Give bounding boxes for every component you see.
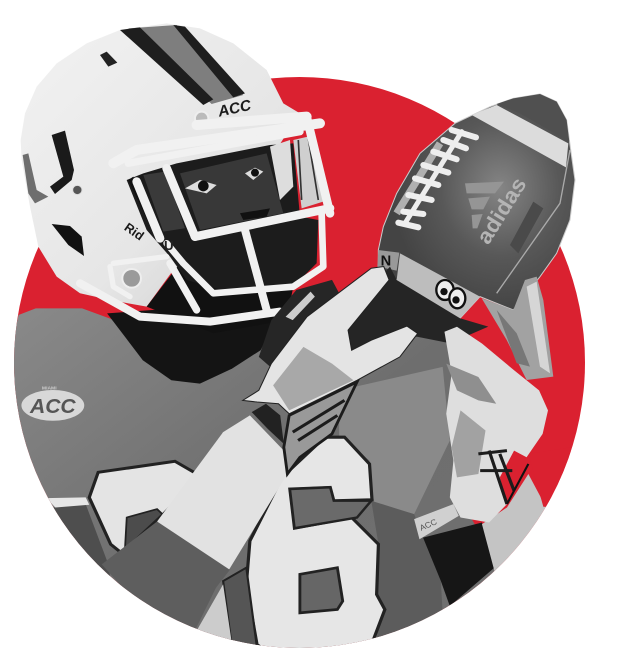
- N mark: [377, 250, 399, 271]
- eyes: [185, 180, 217, 193]
- left glove palm: [243, 267, 418, 414]
- left glove white patch: [286, 292, 315, 320]
- helmet shell: [21, 23, 300, 307]
- wrist tape: [157, 415, 287, 569]
- strap lines: [293, 400, 345, 441]
- side dark panel: [128, 177, 157, 240]
- face: [127, 143, 318, 293]
- lower number fragment: [223, 568, 257, 648]
- player torso and jersey: ACC: [418, 517, 439, 533]
- ACC helmet mark: ACC: [216, 97, 254, 121]
- ACC chest logo: ACC: [29, 395, 76, 418]
- top ball stripe: [472, 105, 568, 167]
- lighter chest panel: [339, 367, 450, 514]
- red gap near forearm: [540, 449, 572, 507]
- number 6 inner notch: [290, 487, 371, 528]
- adidas wordmark: adidas: [471, 173, 531, 248]
- adidas bars: [465, 182, 504, 193]
- faint outer laces: [397, 143, 440, 213]
- U mask badge: U: [164, 238, 174, 253]
- eyes logo: [436, 280, 454, 300]
- left glove dark thumb: [259, 280, 339, 380]
- right glove straps: [478, 451, 514, 504]
- left sleeve: [53, 505, 110, 576]
- face shield glare: [270, 140, 293, 200]
- number hole: [125, 509, 162, 549]
- number 6 counter: [300, 568, 343, 613]
- dark ball underside: [340, 267, 488, 353]
- palm shade: [273, 347, 353, 410]
- ACC chest logo: MIAMI: [42, 386, 57, 392]
- ACC chest logo: [21, 386, 84, 421]
- helmet stripe grey: [128, 25, 243, 104]
- seam: [497, 150, 570, 293]
- number 6: [246, 437, 385, 655]
- thumb guard: [482, 277, 553, 380]
- forearm: [102, 522, 230, 631]
- neck under helmet: [147, 263, 293, 333]
- facemask: [80, 117, 330, 322]
- helmet vent: [100, 52, 117, 67]
- ear vent: [52, 224, 84, 256]
- cheek and nose: [180, 153, 283, 230]
- lower abdomen shade: [372, 502, 442, 638]
- neck collar: [107, 310, 270, 384]
- ball body: [378, 94, 575, 318]
- hands: [243, 267, 548, 523]
- right glove mottled palm: [446, 364, 496, 404]
- wrist edge: [507, 464, 528, 504]
- jersey: [14, 300, 500, 660]
- player torso and jersey: [14, 300, 571, 660]
- helmet stripe dark left: [120, 27, 213, 105]
- sleeve stripe: [46, 497, 89, 507]
- Rid text: Rid: [122, 220, 146, 243]
- left glove wrist straps: [284, 382, 357, 474]
- left jersey number 8: [89, 461, 200, 554]
- snaps: [73, 185, 82, 195]
- helmet: [21, 23, 330, 333]
- U logo: [50, 131, 74, 194]
- arm band: [414, 504, 459, 539]
- right glove: [444, 327, 548, 523]
- ball marks: [510, 202, 543, 253]
- black undersleeve: [423, 523, 494, 606]
- dark wrist cuff: [252, 404, 284, 444]
- laces: [398, 130, 476, 227]
- red circle background: [14, 77, 585, 648]
- ball nose: [497, 94, 569, 142]
- helmet stripe dark right: [173, 25, 245, 97]
- football: N: [381, 253, 391, 269]
- football: [340, 94, 575, 380]
- right forearm: [482, 474, 546, 571]
- lower ball stripe: [397, 253, 480, 318]
